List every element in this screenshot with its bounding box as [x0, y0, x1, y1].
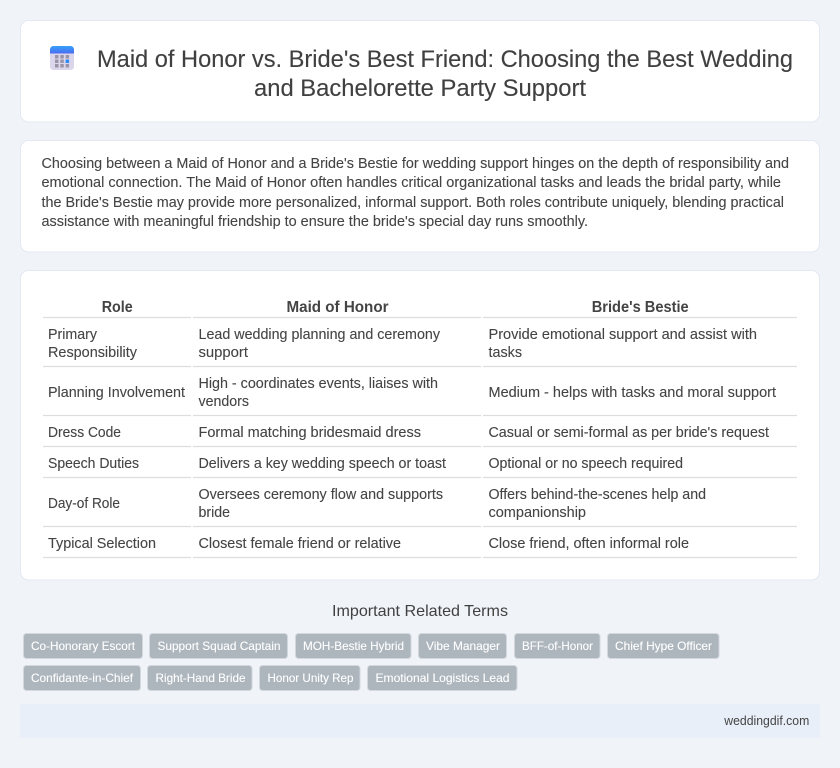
- row: dress code: [48, 425, 769, 441]
- row: planning involvement: [48, 376, 776, 410]
- row: primary responsibility: Responsibility: [48, 345, 138, 361]
- row: day-of role: Day-of Role: [48, 496, 120, 512]
- panel: header: [20, 20, 820, 122]
- tag: Co-Honorary Escort: [24, 634, 142, 658]
- row: typical selection: Typical Selection: [48, 536, 156, 552]
- tag: Vibe Manager: [418, 634, 506, 658]
- intro paragraph: assistance with meaningful friendship to ensure the bride's special day runs smoothly.: [42, 214, 588, 230]
- row: day-of role: [48, 487, 706, 521]
- footer bar: [20, 704, 820, 738]
- tag: Confidante-in-Chief: [24, 666, 140, 690]
- intro paragraph: the Bride's Bestie may provide more personalized, informal support. Both roles contribute uniquely, blending practical: [42, 195, 784, 211]
- tag: BFF-of-Honor: [514, 634, 600, 658]
- row: primary responsibility: support: [198, 345, 248, 361]
- row: typical selection: Closest female friend or relative: [198, 536, 401, 552]
- row: primary responsibility: Primary: [48, 327, 98, 343]
- row: day-of role: companionship: [488, 505, 586, 521]
- tag: Right-Hand Bride: [148, 666, 252, 690]
- row: day-of role: Oversees ceremony flow and supports: [198, 487, 443, 503]
- intro paragraph: [42, 156, 789, 230]
- footer source text: weddingdif.com: [723, 713, 809, 728]
- title: and Bachelorette Party Support: [254, 75, 586, 102]
- tag: Emotional Logistics Lead: [368, 666, 517, 690]
- panel: introduction: [20, 140, 820, 252]
- tag: Emotional Logistics Lead: Emotional Logistics Lead: [376, 671, 510, 685]
- row: primary responsibility: Provide emotional support and assist with: [488, 327, 757, 343]
- row: dress code: Formal matching bridesmaid dress: [198, 425, 421, 441]
- row: typical selection: [48, 536, 689, 552]
- row: speech duties: Delivers a key wedding speech or toast: [198, 456, 446, 472]
- row: dress code: Dress Code: [48, 425, 121, 441]
- tag: Support Squad Captain: Support Squad Captain: [158, 639, 280, 653]
- intro paragraph: Choosing between a Maid of Honor and a Bride's Bestie for wedding support hinges on the depth of responsibility and: [42, 156, 789, 172]
- related terms tags: [24, 634, 719, 690]
- row: planning involvement: Medium - helps with tasks and moral support: [488, 385, 776, 401]
- icon: calendar: [50, 46, 74, 70]
- table header row: Role: [102, 299, 133, 316]
- row: day-of role: bride: [198, 505, 230, 521]
- panel: comparison table: [20, 270, 820, 580]
- row: primary responsibility: [48, 327, 757, 361]
- tag: Chief Hype Officer: Chief Hype Officer: [615, 639, 712, 653]
- tag: MOH-Bestie Hybrid: MOH-Bestie Hybrid: [303, 639, 404, 653]
- row: planning involvement: Planning Involvement: [48, 385, 185, 401]
- tag: Support Squad Captain: [150, 634, 288, 658]
- row: planning involvement: High - coordinates events, liaises with: [198, 376, 438, 392]
- tag: Vibe Manager: Vibe Manager: [426, 639, 500, 653]
- heading: important related terms: Important Related Terms: [332, 603, 508, 620]
- table header row: Maid of Honor: [286, 299, 388, 316]
- table header row: Bride's Bestie: [592, 299, 689, 316]
- tag: Confidante-in-Chief: Confidante-in-Chief: [31, 671, 134, 685]
- row: primary responsibility: tasks: [488, 345, 522, 361]
- row: dress code: Casual or semi-formal as per bride's request: [488, 425, 769, 441]
- tag: MOH-Bestie Hybrid: [296, 634, 411, 658]
- tag: Co-Honorary Escort: Co-Honorary Escort: [31, 639, 136, 653]
- tag: Right-Hand Bride: Right-Hand Bride: [156, 671, 246, 685]
- table header row: [102, 299, 689, 316]
- row: speech duties: Speech Duties: [48, 456, 139, 472]
- row: speech duties: [48, 456, 683, 472]
- tag: Honor Unity Rep: Honor Unity Rep: [268, 671, 354, 685]
- row: speech duties: Optional or no speech required: [488, 456, 683, 472]
- row: primary responsibility: Lead wedding planning and ceremony: [198, 327, 441, 343]
- row: planning involvement: vendors: [198, 394, 249, 410]
- title: Maid of Honor vs. Bride's Best Friend: Choosing the Best Wedding: [97, 46, 793, 73]
- intro paragraph: emotional connection. The Maid of Honor often handles critical organizational tasks and leads the bridal party, while: [42, 175, 781, 191]
- title: [97, 46, 793, 102]
- row: typical selection: Close friend, often informal role: [488, 536, 689, 552]
- tag: Honor Unity Rep: [260, 666, 360, 690]
- tag: BFF-of-Honor: BFF-of-Honor: [522, 639, 593, 653]
- row: day-of role: Offers behind-the-scenes help and: [488, 487, 706, 503]
- tag: Chief Hype Officer: [608, 634, 719, 658]
